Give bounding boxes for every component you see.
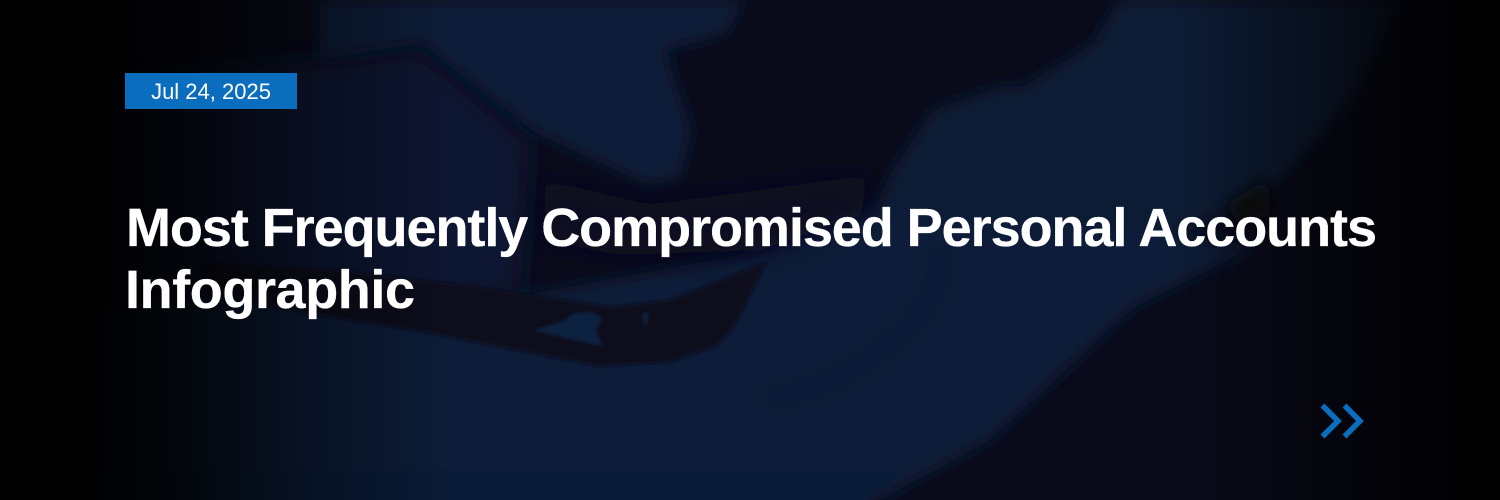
upper finger <box>320 0 745 186</box>
date badge: Jul 24, 2025 <box>151 79 271 104</box>
shadow at hand corner <box>1225 178 1270 225</box>
icon: double chevron arrow <box>1320 404 1364 438</box>
phone edge <box>200 262 767 366</box>
date badge <box>125 73 297 109</box>
title <box>125 198 1376 320</box>
left knuckle <box>120 50 530 300</box>
faint thumb outline <box>769 250 941 397</box>
lower hand bottom strip <box>100 470 905 500</box>
title: Most Frequently Compromised Personal Accounts <box>126 198 1376 258</box>
title: Infographic <box>125 260 415 320</box>
dark hollow below finger <box>545 175 870 255</box>
right hand <box>874 0 1400 300</box>
lower hand and thumb <box>100 205 1260 500</box>
